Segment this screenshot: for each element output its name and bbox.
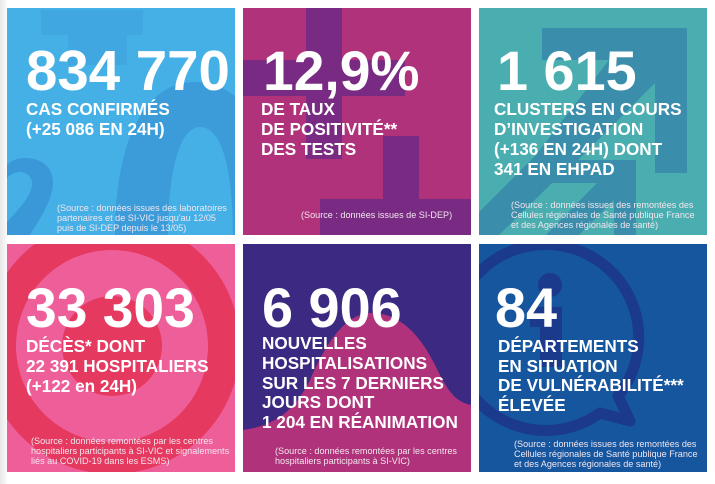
target rings	[7, 244, 235, 472]
panel: clusters	[479, 8, 707, 235]
label: SUR LES 7 DERNIERS	[262, 373, 444, 393]
panel: nouvelles hospitalisations	[243, 244, 471, 472]
label: 22 391 HOSPITALIERS	[26, 356, 209, 376]
key figure: 12,9%	[263, 40, 419, 102]
source note: (Source : données issues des remontées des	[514, 439, 697, 449]
plus-sign shapes	[243, 8, 471, 235]
label: DÉPARTEMENTS	[498, 336, 639, 356]
label: NOUVELLES	[262, 333, 367, 353]
label: CAS CONFIRMÉS	[26, 99, 170, 119]
key figure: 33 303	[26, 277, 195, 339]
source note: (Source : données remontées par les centres	[31, 436, 213, 446]
label: DE TAUX	[261, 99, 336, 119]
background numerals and plus sign	[7, 10, 235, 235]
source note: partenaires et de SI-VIC jusqu'au 12/05	[57, 213, 216, 223]
key figure: 84	[495, 276, 557, 339]
label: DE POSITIVITÉ**	[261, 119, 398, 139]
source note: (Source : données issues des remontées des	[511, 200, 694, 210]
source note: et des Agences régionales de santé)	[511, 220, 658, 230]
key figure: 6 906	[262, 276, 402, 339]
label: 341 EN EHPAD	[494, 159, 615, 179]
label: CLUSTERS EN COURS	[494, 99, 682, 119]
label: ÉLEVÉE	[498, 395, 566, 415]
source note: hospitaliers participants à SI-VIC)	[275, 456, 410, 466]
epidemic curve	[243, 313, 471, 472]
label: DÉCÈS* DONT	[26, 336, 146, 356]
label: (+136 EN 24H) DONT	[494, 139, 663, 159]
label: 1 204 EN RÉANIMATION	[262, 412, 458, 432]
source note: liés au COVID-19 dans les ESMS)	[31, 456, 169, 466]
label: DES TESTS	[261, 139, 356, 159]
label: EN SITUATION	[498, 356, 618, 376]
arrow shapes	[479, 28, 687, 235]
label: JOURS DONT	[262, 392, 375, 412]
label: (+25 086 EN 24H)	[26, 119, 165, 139]
source note: Cellules régionales de Santé publique France	[511, 210, 695, 220]
source note: (Source : données remontées par les centres	[275, 446, 457, 456]
label: HOSPITALISATIONS	[262, 353, 427, 373]
label: DE VULNÉRABILITÉ***	[498, 375, 684, 395]
source note: puis de SI-DEP depuis le 13/05)	[57, 223, 186, 233]
icon: info speech bubble	[453, 244, 639, 430]
label: (+122 en 24H)	[26, 376, 137, 396]
panel: départements en vulnérabilité	[479, 244, 707, 472]
label: D’INVESTIGATION	[494, 119, 643, 139]
source note: hospitaliers participants à SI-VIC et signalements	[31, 446, 230, 456]
panel: cas confirmés	[7, 8, 235, 235]
panel: décès	[7, 244, 235, 472]
source note: (Source : données issues des laboratoires	[57, 203, 227, 213]
key figure: 834 770	[26, 39, 230, 102]
source note: Cellules régionales de Santé publique France	[514, 449, 698, 459]
key figure: 1 615	[497, 39, 637, 102]
source note: et des Agences régionales de santé)	[514, 459, 661, 469]
source note: (Source : données issues de SI-DEP)	[301, 210, 452, 220]
panel: taux de positivité	[243, 8, 471, 235]
